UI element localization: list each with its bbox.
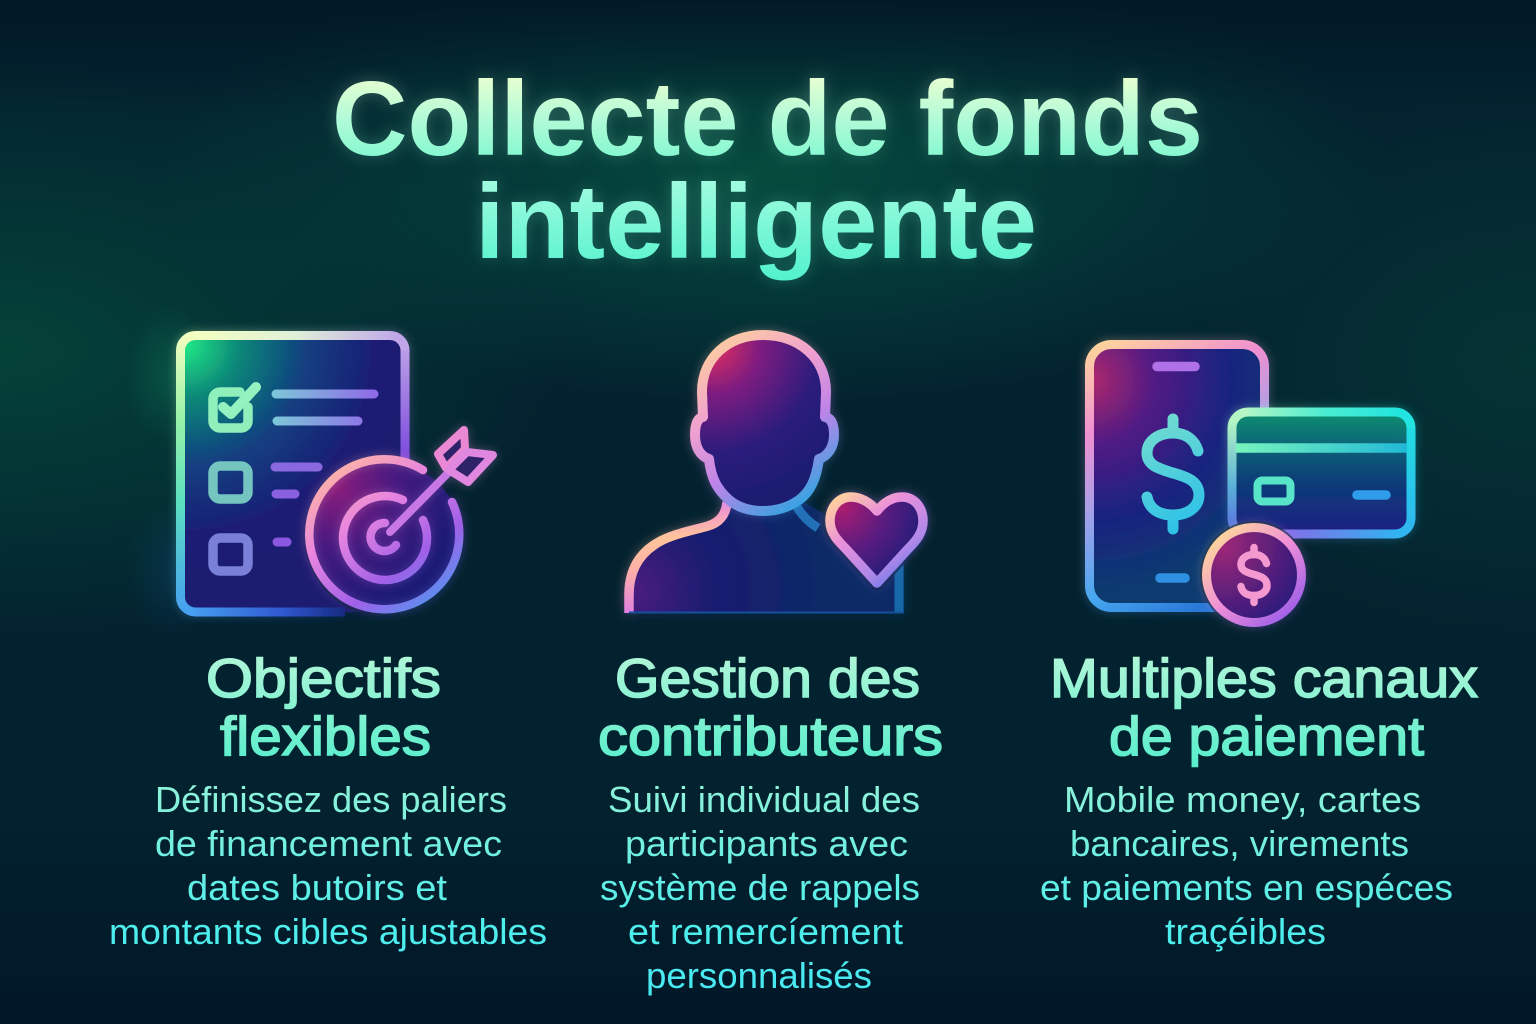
- unchecked box 3: [213, 538, 248, 571]
- arrow: [390, 430, 493, 532]
- dollar sign: [1147, 419, 1199, 529]
- description: objectifs flexibles: [109, 779, 547, 952]
- phone: [1090, 344, 1264, 608]
- description: multiples canaux de paiement: [1040, 779, 1453, 952]
- heading: objectifs flexibles: [206, 647, 441, 767]
- description: gestion des contributeurs: et remercíement: [628, 911, 903, 952]
- description: objectifs flexibles: dates butoirs et: [187, 867, 447, 908]
- description: multiples canaux de paiement: traçéibles: [1165, 911, 1326, 952]
- heading: multiples canaux de paiement: Multiples canaux: [1050, 647, 1478, 709]
- title: Collecte de fonds: [332, 60, 1203, 178]
- icon: person with heart: [629, 335, 923, 613]
- panel: gestion des contributeurs: [598, 335, 943, 996]
- icon: checklist with target: [180, 336, 493, 618]
- icon: phone, card and coin: [1090, 344, 1411, 629]
- heading: objectifs flexibles: flexibles: [220, 705, 431, 767]
- description: multiples canaux de paiement: Mobile money, cartes: [1064, 779, 1421, 820]
- description: objectifs flexibles: de financement avec: [155, 823, 502, 864]
- checked box: [213, 387, 256, 428]
- heading: gestion des contributeurs: contributeurs: [598, 705, 943, 767]
- card: [1232, 412, 1411, 534]
- coin: [1200, 521, 1308, 629]
- description: gestion des contributeurs: Suivi individual des: [608, 779, 920, 820]
- description: gestion des contributeurs: [600, 779, 920, 996]
- checklist document: [180, 336, 405, 612]
- text lines: [275, 394, 374, 542]
- person head: [695, 335, 834, 511]
- description: objectifs flexibles: Définissez des paliers: [155, 779, 507, 820]
- panel: multiples canaux de paiement: [1040, 344, 1478, 952]
- heading: objectifs flexibles: Objectifs: [206, 647, 441, 709]
- description: gestion des contributeurs: système de rappels: [600, 867, 920, 908]
- description: gestion des contributeurs: participants avec: [625, 823, 908, 864]
- heart: [830, 497, 923, 583]
- title: [332, 60, 1203, 281]
- heading: gestion des contributeurs: [598, 647, 943, 767]
- unchecked box 2: [213, 466, 248, 499]
- description: multiples canaux de paiement: et paiements en espéces: [1040, 867, 1453, 908]
- heading: multiples canaux de paiement: de paiement: [1109, 705, 1424, 767]
- description: gestion des contributeurs: personnalisés: [646, 955, 872, 996]
- heading: multiples canaux de paiement: [1050, 647, 1478, 767]
- heading: gestion des contributeurs: Gestion des: [615, 647, 920, 709]
- target: [305, 430, 493, 618]
- person body: [629, 500, 904, 613]
- panel: objectifs flexibles: [109, 336, 547, 952]
- title: intelligente: [475, 163, 1037, 281]
- description: objectifs flexibles: montants cibles ajustables: [109, 911, 547, 952]
- description: multiples canaux de paiement: bancaires, virements: [1070, 823, 1409, 864]
